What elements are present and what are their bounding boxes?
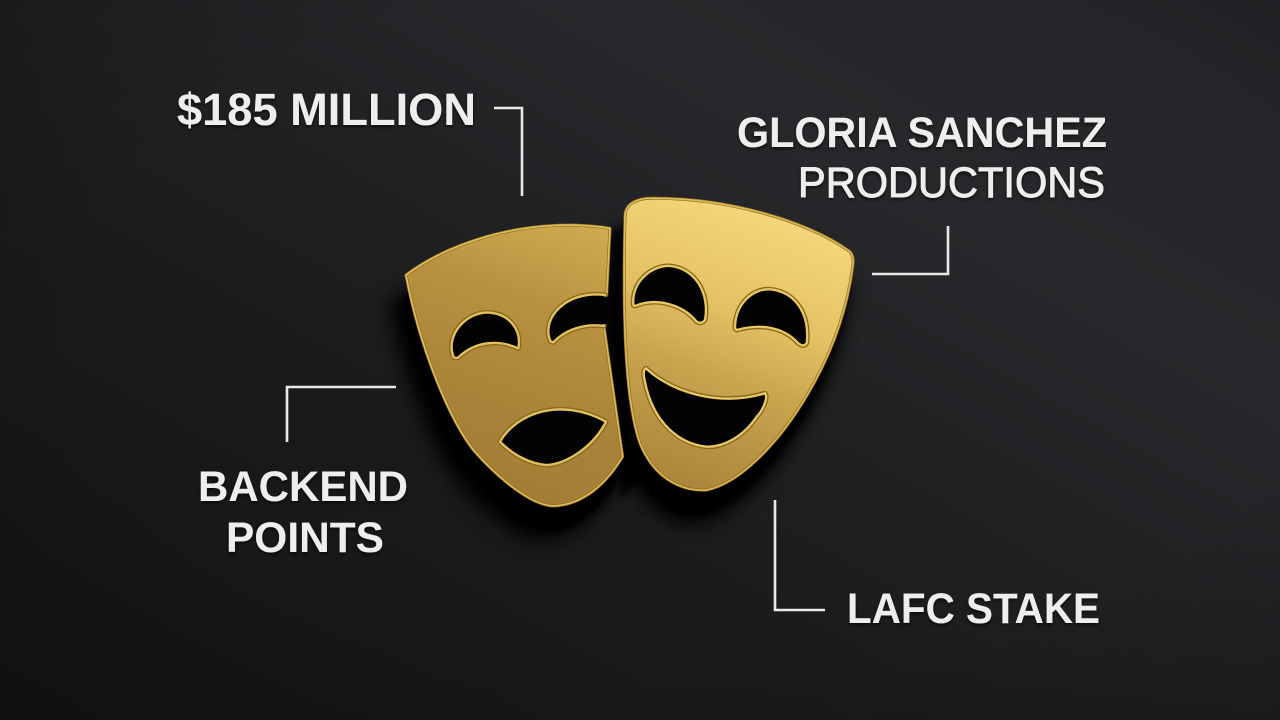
label: backend points: BACKEND — [198, 464, 408, 511]
right eye opening reaching the mask edge — [601, 297, 614, 325]
mask drop shadow — [388, 223, 849, 541]
label: backend points — [198, 464, 408, 562]
connector line: $185 million — [494, 108, 522, 196]
label: $185 million: $185 MILLION — [177, 84, 476, 135]
icon: theatre masks — [406, 198, 853, 506]
label: Gloria Sanchez Productions: PRODUCTIONS — [798, 160, 1105, 207]
label: backend points: POINTS — [226, 515, 384, 562]
callout: LAFC stake — [775, 500, 1100, 633]
callout: $185 million — [177, 84, 522, 196]
label: LAFC stake: LAFC STAKE — [847, 586, 1100, 633]
label: Gloria Sanchez Productions — [737, 110, 1107, 207]
icon: tragedy mask (left) — [406, 225, 623, 506]
connector line: Gloria Sanchez Productions — [872, 226, 948, 274]
label: Gloria Sanchez Productions: GLORIA SANCHEZ — [737, 110, 1107, 157]
connector line: LAFC stake — [775, 500, 825, 610]
gap shadow between the masks — [606, 228, 640, 500]
callout: backend points — [198, 387, 408, 562]
icon: comedy mask (right) — [624, 198, 853, 490]
connector line: backend points — [287, 387, 396, 442]
callout: Gloria Sanchez Productions — [737, 110, 1107, 274]
